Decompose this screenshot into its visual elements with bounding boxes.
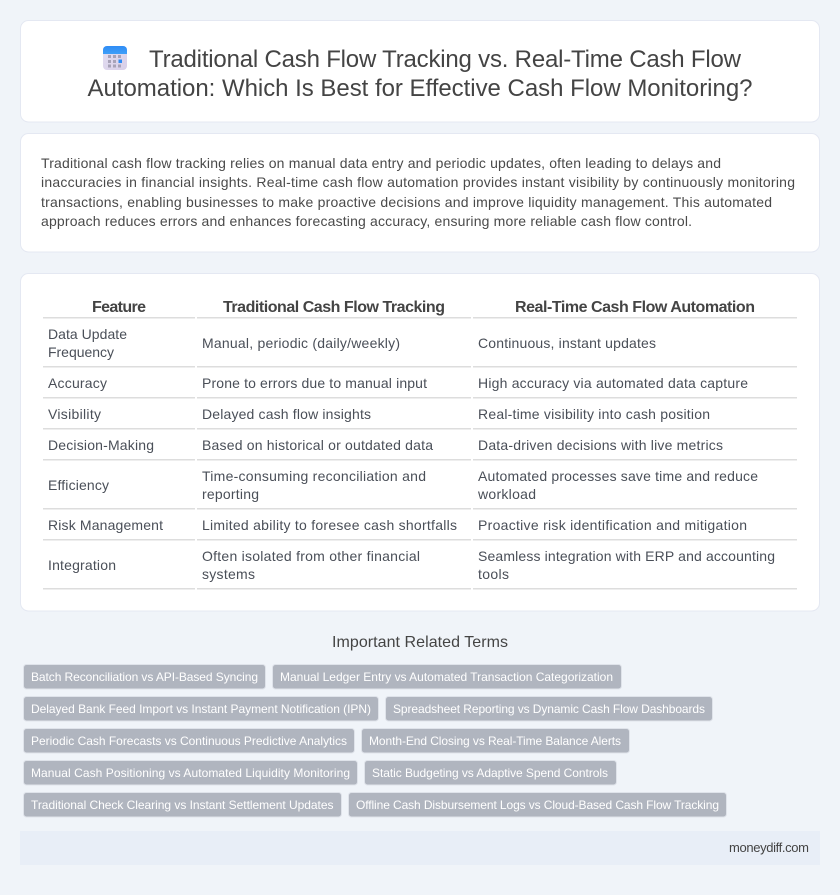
row: risk management: Risk Management [48, 517, 163, 533]
title: Traditional Cash Flow Tracking vs. Real-Time Cash Flow [149, 46, 742, 73]
row: efficiency [48, 468, 758, 502]
row: integration: Often isolated from other financial [202, 548, 420, 564]
row: data update frequency: Manual, periodic (daily/weekly) [202, 335, 400, 351]
tag: Manual Cash Positioning vs Automated Liquidity Monitoring [31, 766, 350, 780]
tag [364, 760, 616, 785]
tag: Periodic Cash Forecasts vs Continuous Predictive Analytics [31, 734, 347, 748]
footer bar [20, 831, 820, 865]
row: visibility: Real-time visibility into cash position [478, 406, 710, 422]
footer text: site name: moneydiff.com [729, 840, 809, 855]
row: decision-making: Based on historical or outdated data [202, 437, 433, 453]
row: risk management: Limited ability to foresee cash shortfalls [202, 517, 457, 533]
tag [24, 696, 378, 721]
row: efficiency: reporting [202, 486, 259, 502]
related term tags [24, 664, 726, 817]
tag [348, 792, 726, 817]
tag [24, 760, 358, 785]
row: decision-making [48, 437, 723, 453]
tag: Static Budgeting vs Adaptive Spend Controls [372, 766, 608, 780]
table header: Real-Time Cash Flow Automation [515, 299, 755, 316]
intro paragraph [41, 155, 795, 229]
tag [386, 696, 712, 721]
row: efficiency: Efficiency [48, 477, 109, 493]
tag [362, 728, 630, 753]
row: risk management [48, 517, 747, 533]
panel: title card [20, 20, 820, 122]
row: data update frequency [48, 326, 656, 360]
tag: Offline Cash Disbursement Logs vs Cloud-Based Cash Flow Tracking [356, 798, 719, 812]
title [88, 46, 752, 102]
row: efficiency: workload [477, 486, 536, 502]
tag: Month-End Closing vs Real-Time Balance Alerts [369, 734, 621, 748]
intro paragraph: approach reduces errors and enhances forecasting accuracy, ensuring more reliable cash flow control. [41, 213, 692, 229]
row: efficiency: Automated processes save time and reduce [478, 468, 758, 484]
tag [24, 664, 266, 689]
panel: intro text [20, 134, 820, 252]
row: accuracy: Prone to errors due to manual input [202, 375, 427, 391]
row: visibility: Visibility [48, 406, 101, 422]
table header: Feature [92, 299, 146, 316]
row: visibility [48, 406, 710, 422]
row: data update frequency: Frequency [48, 344, 114, 360]
row: visibility: Delayed cash flow insights [202, 406, 371, 422]
row: data update frequency: Continuous, instant updates [478, 335, 656, 351]
tag: Delayed Bank Feed Import vs Instant Payment Notification (IPN) [31, 702, 371, 716]
tag [272, 664, 622, 689]
row: decision-making: Data-driven decisions with live metrics [478, 437, 723, 453]
row: accuracy: Accuracy [48, 375, 107, 391]
row: accuracy: High accuracy via automated data capture [478, 375, 748, 391]
tag: Batch Reconciliation vs API-Based Syncing [31, 670, 258, 684]
tag: Traditional Check Clearing vs Instant Settlement Updates [31, 798, 334, 812]
row: efficiency: Time-consuming reconciliation and [202, 468, 426, 484]
tag [24, 728, 354, 753]
title: Automation: Which Is Best for Effective Cash Flow Monitoring? [88, 75, 752, 102]
row: integration: systems [202, 566, 255, 582]
row: risk management: Proactive risk identification and mitigation [478, 517, 747, 533]
intro paragraph: transactions, enabling businesses to make proactive decisions and improve liquidity management. This automated [41, 194, 772, 210]
icon: calendar [103, 46, 127, 70]
intro paragraph: Traditional cash flow tracking relies on manual data entry and periodic updates, often leading to delays and [41, 155, 721, 171]
tag: Spreadsheet Reporting vs Dynamic Cash Flow Dashboards [393, 702, 705, 716]
table header: Traditional Cash Flow Tracking [223, 299, 445, 316]
row: integration: Seamless integration with ERP and accounting [478, 548, 775, 564]
row: integration: Integration [48, 557, 116, 573]
tag [24, 792, 342, 817]
row: decision-making: Decision-Making [48, 437, 154, 453]
row: accuracy [48, 375, 748, 391]
heading: important related terms: Important Related Terms [332, 634, 508, 651]
tag: Manual Ledger Entry vs Automated Transaction Categorization [280, 670, 613, 684]
table header [92, 299, 755, 316]
row: data update frequency: Data Update [48, 326, 127, 342]
intro paragraph: inaccuracies in financial insights. Real-time cash flow automation provides instant visibility by continuously monitoring [41, 174, 795, 190]
row: integration: tools [478, 566, 509, 582]
row: integration [48, 548, 775, 582]
panel: comparison table [20, 274, 820, 611]
